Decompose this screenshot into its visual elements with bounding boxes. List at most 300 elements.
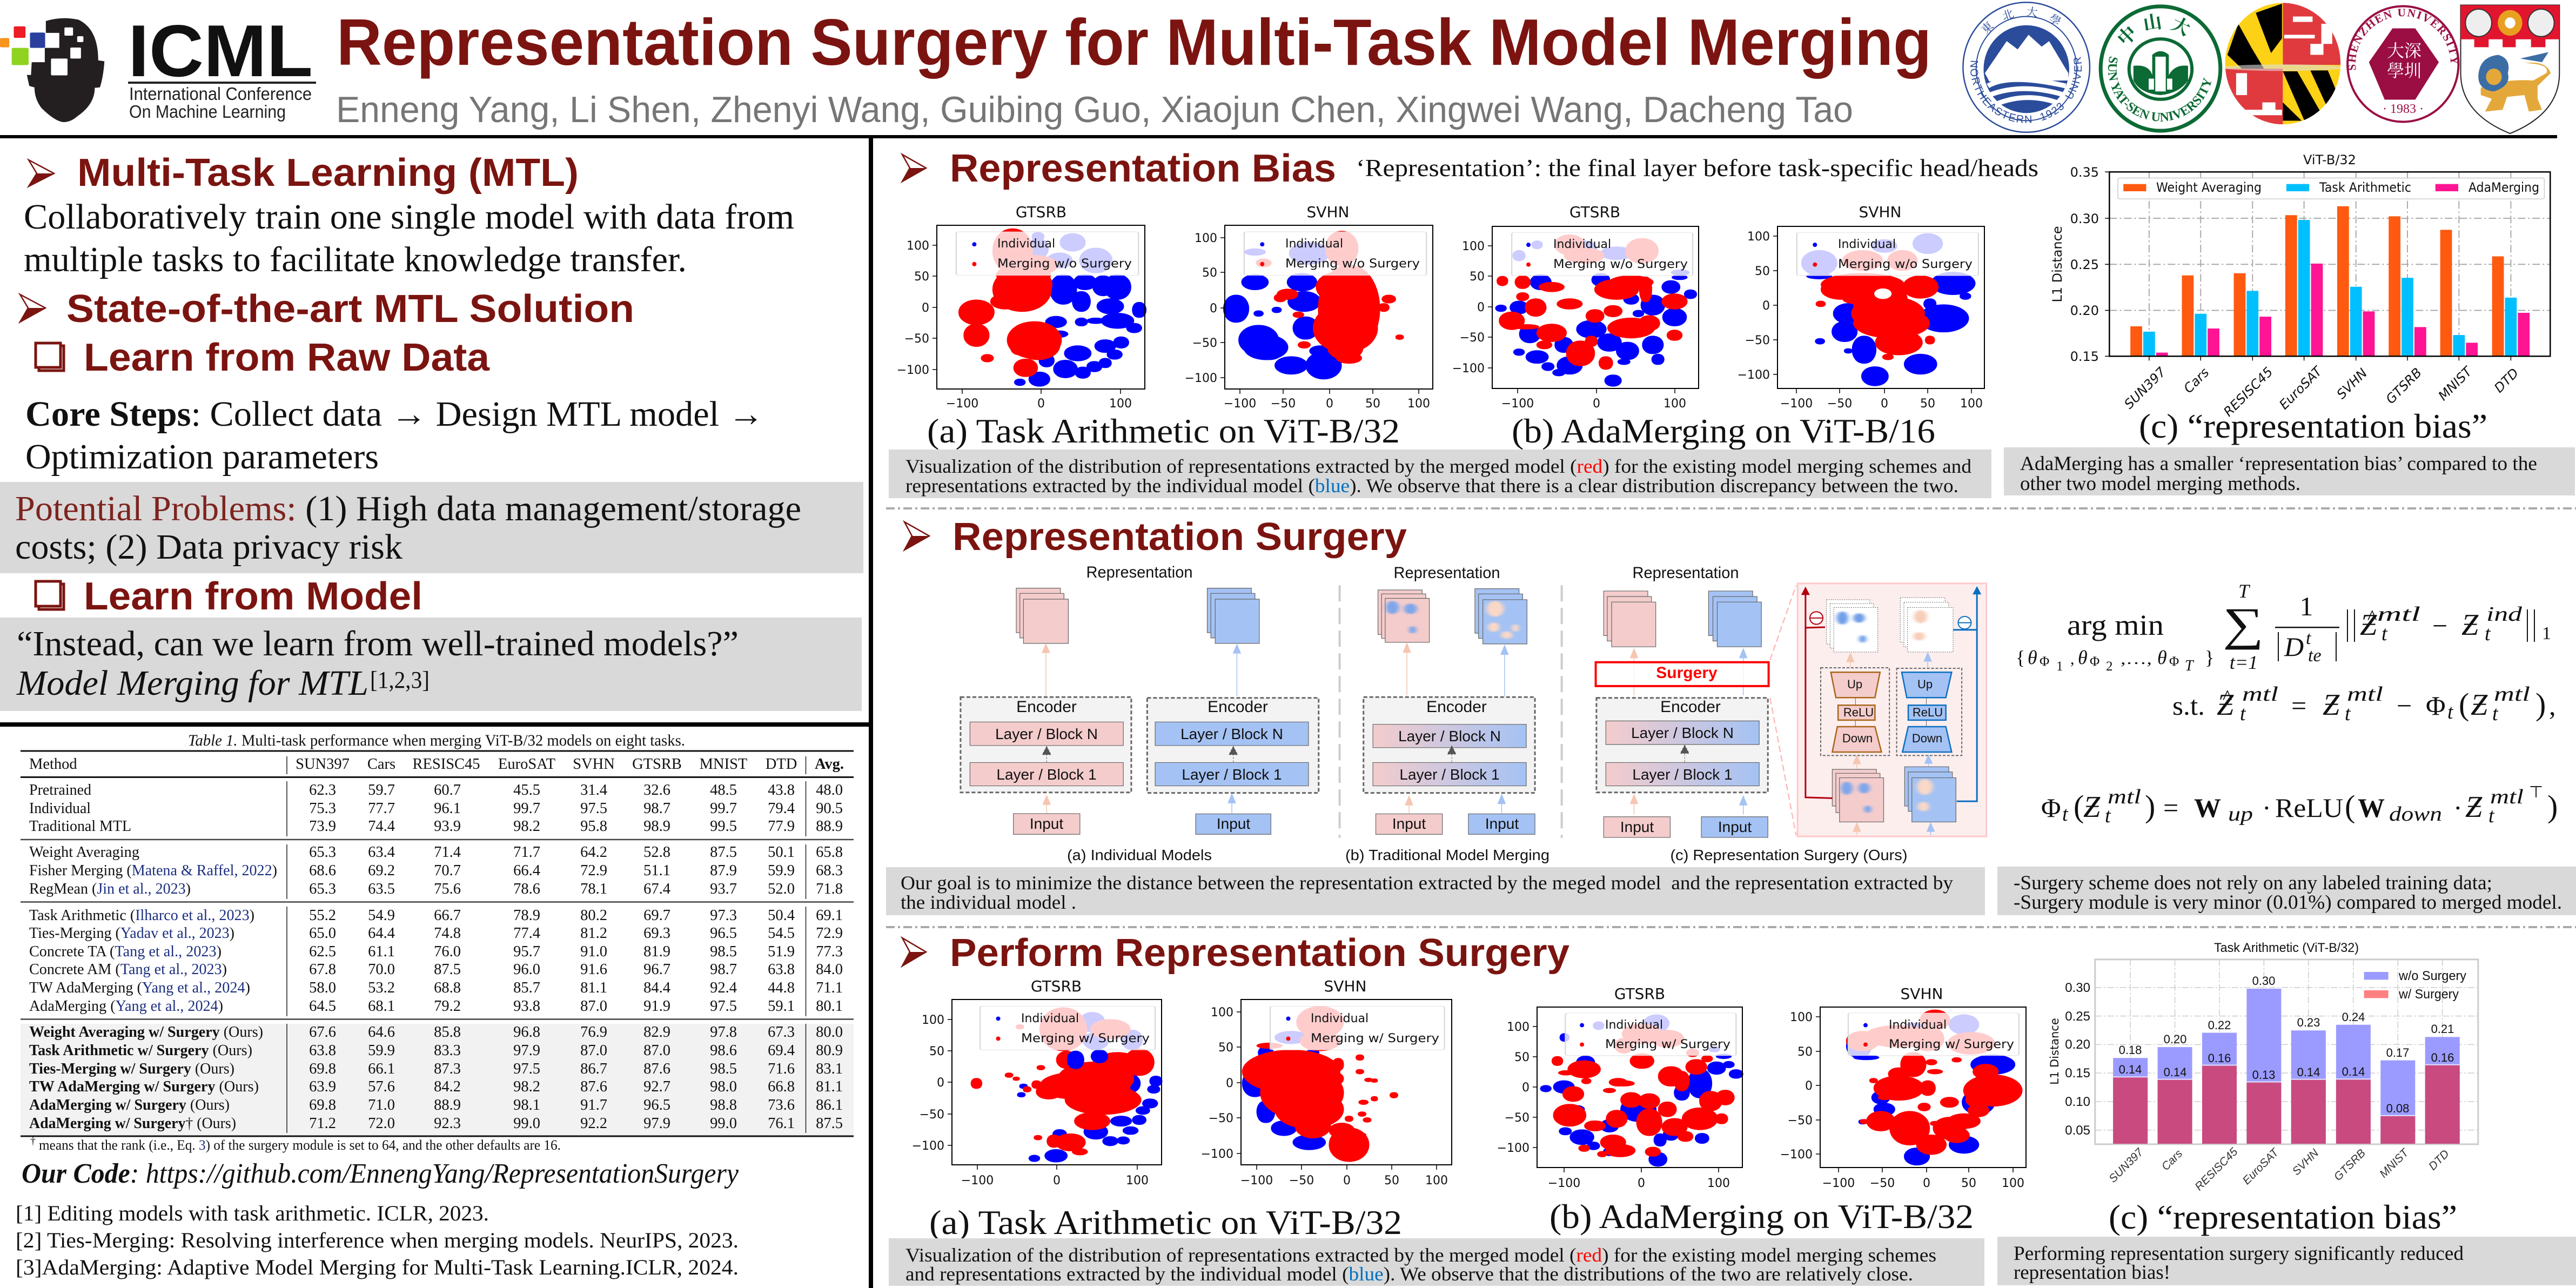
callout: t-SNE visualization note <box>889 450 1991 498</box>
plot frames and axes: bias: −100 <box>897 364 929 377</box>
equations: surgery objective: Ƶ <box>2360 608 2377 642</box>
bar chart: Task Arithmetic with and without surgery: 0.08 <box>2386 1102 2409 1115</box>
table values: 71.7 <box>513 844 540 861</box>
bar chart: Task Arithmetic with and without surgery: 0.14 <box>2342 1065 2365 1078</box>
bar chart: Task Arithmetic with and without surgery: 0.24 <box>2342 1010 2365 1024</box>
plot frames and axes: bias: SVHN <box>1307 203 1349 221</box>
equations: surgery objective: = <box>2291 690 2306 721</box>
table values: 97.3 <box>710 907 737 924</box>
diagram: model architectures: Encoder <box>1660 698 1721 716</box>
text: core steps: Core Steps: Collect data → Design MTL model → <box>25 394 764 434</box>
table footnote: means that the rank (i.e., Eq. 3) of the surgery module is set to 64, and the other defaults are 16. <box>39 1137 561 1153</box>
table values: 83.1 <box>816 1061 843 1077</box>
plot frames and axes: bias: 100 <box>1195 232 1217 245</box>
equations: surgery objective: mtl <box>2490 786 2524 808</box>
table values: 92.3 <box>434 1115 461 1132</box>
equations: surgery objective: D <box>2284 632 2304 662</box>
diagram: model architectures: Input <box>1030 815 1063 832</box>
plot frames and axes: surgery: 100 <box>1507 1021 1530 1034</box>
table values: 81.1 <box>580 980 607 996</box>
table values: 63.8 <box>768 961 795 978</box>
table values: 87.5 <box>434 961 461 978</box>
table values: 85.8 <box>434 1024 461 1041</box>
table values: 66.1 <box>368 1061 395 1077</box>
table method column: Pretrained <box>29 782 91 799</box>
diagram: model architectures: Layer / Block N <box>995 726 1098 742</box>
plot frames and axes: bias: −50 <box>904 332 929 346</box>
text: core steps <box>25 394 764 477</box>
logo: Sun Yat-sen University <box>2098 4 2223 133</box>
table values: 96.5 <box>643 1097 670 1113</box>
table values: 55.2 <box>309 907 336 924</box>
table values: 43.8 <box>768 782 795 799</box>
table values: 98.0 <box>710 1078 737 1095</box>
callout: AdaMerging note: AdaMerging has a smaller ‘representation bias’ compared to the <box>2020 453 2537 475</box>
table values: 69.8 <box>309 1097 336 1113</box>
table values: 96.5 <box>710 925 737 942</box>
bar chart: ViT-B/32 L1 distance: 0.30 <box>2070 211 2099 226</box>
table method column: TW AdaMerging w/ Surgery (Ours) <box>29 1078 259 1095</box>
plot frames and axes: bias: −50 <box>1192 337 1217 350</box>
diagram: model architectures: Input <box>1485 815 1519 832</box>
plot frames and axes: bias: 0 <box>1326 397 1333 411</box>
table values: 80.0 <box>816 1024 843 1041</box>
logo: ICML: On Machine Learning <box>129 102 286 122</box>
plot frames and axes: bias: −50 <box>1827 397 1852 411</box>
logo: Shenzhen University: 圳 <box>2404 61 2421 81</box>
table values: 44.8 <box>768 980 795 996</box>
table values: 87.0 <box>643 1042 670 1059</box>
references <box>16 1201 739 1279</box>
plot frames and axes: bias: 50 <box>1202 266 1217 280</box>
table values: 83.3 <box>434 1042 461 1059</box>
plot frames and axes: surgery: −50 <box>1505 1111 1530 1125</box>
table values: 74.8 <box>434 925 461 942</box>
table values: 91.0 <box>580 943 607 960</box>
plot frames and axes: surgery: 100 <box>1425 1174 1448 1188</box>
equations: surgery objective: 1 <box>2542 623 2551 643</box>
table header: Cars <box>367 756 395 773</box>
equations: surgery objective: arg min <box>2067 609 2164 641</box>
plot frames and axes: surgery: −50 <box>1289 1174 1314 1188</box>
table method column: Fisher Merging (Matena & Raffel, 2022) <box>29 862 277 879</box>
table values: 99.0 <box>513 1115 540 1132</box>
table method column: Concrete TA (Tang et al., 2023) <box>29 943 222 960</box>
callout: AdaMerging note <box>2004 447 2575 495</box>
bar chart: Task Arithmetic with and without surgery: 0.05 <box>2065 1123 2090 1138</box>
equations: surgery objective: ) <box>2547 789 2558 824</box>
table values: 87.5 <box>710 844 737 861</box>
table values: 69.7 <box>643 907 670 924</box>
table values: 60.7 <box>434 782 461 799</box>
table values: 63.9 <box>309 1078 336 1095</box>
table values: 71.1 <box>816 980 843 996</box>
table values: 54.5 <box>768 925 795 942</box>
equations: surgery objective: t <box>2105 804 2111 827</box>
plot frames and axes: bias <box>897 203 1984 411</box>
panel: representation bias <box>889 147 2575 498</box>
table values: 91.7 <box>580 1097 607 1113</box>
plot frames and axes: surgery: 50 <box>1384 1174 1399 1188</box>
table values: 63.5 <box>368 881 395 897</box>
captions: surgery plots: (a) Task Arithmetic on ViT-B/32 <box>929 1203 1402 1242</box>
table values: 59.1 <box>768 998 795 1015</box>
bar chart: Task Arithmetic with and without surgery: 0.22 <box>2208 1018 2231 1032</box>
bar chart: Task Arithmetic with and without surgery: RESISC45 <box>2192 1145 2240 1193</box>
table values: 90.5 <box>816 800 843 817</box>
equations: surgery objective: ,…, <box>2121 650 2152 668</box>
table values: 69.8 <box>309 1061 336 1077</box>
table values: 98.5 <box>710 943 737 960</box>
plot frames and axes: bias: 0 <box>1881 397 1888 411</box>
table values: 73.6 <box>768 1097 795 1113</box>
callout: potential problems <box>0 482 863 573</box>
table values: 50.1 <box>768 844 795 861</box>
table values: 72.9 <box>580 862 607 879</box>
equations: surgery objective: t <box>2447 701 2454 723</box>
plot frames and axes: surgery: 100 <box>922 1014 944 1027</box>
diagram: model architectures: Down <box>1912 732 1942 745</box>
logo: Shenzhen University: 大 <box>2387 41 2404 61</box>
table values: 92.4 <box>710 980 737 996</box>
equations: surgery objective: 2 <box>2106 659 2112 674</box>
table values: 87.0 <box>580 1042 607 1059</box>
bar chart: ViT-B/32 L1 distance <box>2050 152 2550 419</box>
table values: 48.5 <box>710 782 737 799</box>
equations: surgery objective: te <box>2308 646 2322 666</box>
plot frames and axes: surgery: −50 <box>1870 1177 1895 1190</box>
table values: 96.0 <box>513 961 540 978</box>
equations: surgery objective: 1 <box>2056 659 2063 674</box>
plot frames and axes: surgery: 0 <box>1053 1174 1061 1188</box>
bar chart: Task Arithmetic with and without surgery: MNIST <box>2377 1146 2412 1180</box>
callout: surgery result <box>1997 1237 2576 1285</box>
heading: Multi-Task Learning: Multi-Task Learning (MTL) <box>77 151 579 194</box>
table values: 99.7 <box>513 800 540 817</box>
equations: surgery objective: ( <box>2459 687 2469 722</box>
diagram: model architectures: Layer / Block 1 <box>1399 766 1500 783</box>
table values: 70.7 <box>434 862 461 879</box>
callout: surgery properties: -Surgery scheme does not rely on any labeled training data; <box>2014 872 2492 894</box>
table values: 67.4 <box>643 881 670 897</box>
equations: surgery objective: Ƶ <box>2323 688 2340 722</box>
text: MTL definition: multiple tasks to facilitate knowledge transfer. <box>24 240 687 279</box>
callout: potential problems: costs; (2) Data privacy risk <box>15 527 403 567</box>
captions: bias plots: (b) AdaMerging on ViT-B/16 <box>1512 412 1935 450</box>
table values: 92.7 <box>643 1078 670 1095</box>
table values: 80.2 <box>580 907 607 924</box>
equations: surgery objective: ) <box>2145 789 2155 824</box>
references: [3]AdaMerging: Adaptive Model Merging for Multi-Task Learning.ICLR, 2024. <box>16 1255 739 1279</box>
callout: t-SNE visualization note: Visualization of the distribution of representations extracted by the merged model ( red) for the existing model merging schemes and <box>905 455 1971 477</box>
plot frames and axes: bias: GTSRB <box>1569 203 1620 221</box>
bar chart: ViT-B/32 L1 distance: DTD <box>2491 365 2521 395</box>
callout: surgery properties <box>1997 867 2576 915</box>
table values: 80.9 <box>816 1042 843 1059</box>
plot frames and axes: bias: Merging w/o Surgery <box>1553 258 1688 271</box>
table values: 98.2 <box>513 818 540 835</box>
table header: Avg. <box>815 756 844 773</box>
bar chart: Task Arithmetic with and without surgery: 0.16 <box>2431 1051 2454 1064</box>
bar chart: Task Arithmetic with and without surgery: 0.20 <box>2065 1037 2090 1052</box>
diagram: model architectures: Layer / Block 1 <box>996 766 1097 783</box>
scatter points: bias t-SNE plots <box>956 229 1978 386</box>
table values: 66.8 <box>768 1078 795 1095</box>
plot frames and axes: bias: Individual <box>1838 238 1896 251</box>
table values: 71.8 <box>816 881 843 897</box>
equations: surgery objective: mtl <box>2242 683 2278 706</box>
plot frames and axes: surgery: 50 <box>1797 1045 1813 1059</box>
icon: arrow bullet <box>904 522 929 551</box>
equations: surgery objective: , <box>2070 650 2075 668</box>
plot frames and axes: surgery: Individual <box>1889 1018 1947 1032</box>
icon: arrow bullet <box>20 294 45 323</box>
plot frames and axes: bias: Merging w/o Surgery <box>1285 257 1420 271</box>
captions: bias plots: (a) Task Arithmetic on ViT-B/32 <box>927 412 1400 450</box>
table method column: AdaMerging w/ Surgery (Ours) <box>29 1097 230 1113</box>
table header: SVHN <box>573 756 615 773</box>
bar chart: ViT-B/32 L1 distance: L1 Distance <box>2050 226 2065 303</box>
table values: 70.0 <box>368 961 395 978</box>
bar chart: Task Arithmetic with and without surgery: 0.14 <box>2164 1065 2186 1079</box>
table values: 71.6 <box>768 1061 795 1077</box>
callout: surgery t-SNE note: and representations extracted by the individual model ( blue). We observe that the distributions of the two are relatively close. <box>905 1263 1913 1285</box>
table values: 79.4 <box>768 800 795 817</box>
bar chart: ViT-B/32 L1 distance: 0.15 <box>2070 349 2099 364</box>
icon: arrow bullet <box>29 160 54 187</box>
plot frames and axes: surgery: GTSRB <box>1614 985 1665 1003</box>
bar chart: Task Arithmetic with and without surgery: EuroSAT <box>2240 1145 2282 1187</box>
equations: surgery objective: T <box>2185 658 2195 674</box>
plot frames and axes: bias: 0 <box>1477 301 1485 314</box>
diagram: model architectures: ReLU <box>1913 706 1943 719</box>
callout: surgery t-SNE note: Visualization of the distribution of representations extracted by the merged model ( red) for the existing model merging schemes <box>905 1244 1936 1266</box>
plot frames and axes: surgery: −100 <box>1822 1177 1855 1190</box>
text: MTL definition <box>24 197 794 279</box>
bar chart: ViT-B/32 L1 distance: SVHN <box>2334 365 2370 402</box>
table values: 51.1 <box>643 862 670 879</box>
bar chart: Task Arithmetic with and without surgery: 0.23 <box>2297 1016 2320 1029</box>
table values: 88.9 <box>434 1097 461 1113</box>
table values: 87.3 <box>434 1061 461 1077</box>
references: [1] Editing models with task arithmetic. ICLR, 2023. <box>16 1201 489 1225</box>
callout: model merging question: Model Merging for MTL <box>16 663 368 703</box>
table values: 78.1 <box>580 881 607 897</box>
equations: surgery objective: Φ <box>2041 793 2061 823</box>
table values: 93.9 <box>434 818 461 835</box>
plot frames and axes: surgery: 100 <box>2002 1177 2024 1190</box>
plot frames and axes: surgery: 50 <box>1514 1051 1530 1064</box>
bar chart: Task Arithmetic with and without surgery: SUN397 <box>2107 1145 2146 1185</box>
plot frames and axes: bias: 50 <box>1365 397 1380 411</box>
callout: surgery result: representation bias! <box>2014 1262 2170 1284</box>
plot frames and axes: surgery: −50 <box>920 1108 944 1122</box>
bar chart: Task Arithmetic with and without surgery: 0.13 <box>2252 1068 2275 1082</box>
table method column: Individual <box>29 800 91 817</box>
diagram: model architectures: Encoder <box>1208 698 1268 716</box>
caption: surgery bias chart: (c) “representation bias” <box>2109 1198 2457 1236</box>
note: representation definition: ‘Representation’: the final layer before task-specific head/heads <box>1356 154 2038 182</box>
plot frames and axes: surgery: Merging w/ Surgery <box>1021 1032 1150 1045</box>
table values: 80.1 <box>816 998 843 1015</box>
plot frames and axes: surgery: Individual <box>1605 1018 1663 1032</box>
table values: 71.4 <box>434 844 461 861</box>
table header: RESISC45 <box>412 756 480 773</box>
table values: 99.7 <box>710 800 737 817</box>
table header: MNIST <box>700 756 747 773</box>
table values: 79.2 <box>434 998 461 1015</box>
equations: surgery objective: 1 <box>2299 591 2313 621</box>
equations: surgery objective: · <box>2453 793 2463 823</box>
diagram: model architectures: Up <box>1917 677 1933 691</box>
table method column <box>29 756 277 1132</box>
icon: checkbox bullet <box>36 581 64 609</box>
plot frames and axes: surgery: −100 <box>1780 1148 1813 1162</box>
logo: ICML: International Conference <box>129 84 312 104</box>
icon: arrow bullet <box>902 938 926 967</box>
table values: 74.4 <box>368 818 395 835</box>
plot frames and axes: bias: Merging w/o Surgery <box>1838 258 1973 271</box>
table values: 67.8 <box>309 961 336 978</box>
table values: 98.7 <box>710 961 737 978</box>
table values: 99.5 <box>710 818 737 835</box>
plot frames and axes: bias: 0 <box>1037 397 1045 411</box>
diagram: model architectures: Encoder <box>1426 698 1487 716</box>
callout: AdaMerging note: other two model merging methods. <box>2020 473 2300 495</box>
diagram: model architectures: Representation <box>1633 564 1739 582</box>
equations: surgery objective: t <box>2345 702 2351 725</box>
table values: 95.8 <box>580 818 607 835</box>
bar chart: ViT-B/32 L1 distance: GTSRB <box>2383 365 2425 407</box>
plot frames and axes: bias: −100 <box>1501 397 1534 411</box>
table values: 86.7 <box>580 1061 607 1077</box>
table header: GTSRB <box>632 756 682 773</box>
equations: surgery objective: − <box>2397 690 2412 721</box>
table values: 87.9 <box>710 862 737 879</box>
table values: 64.2 <box>580 844 607 861</box>
table values: 87.6 <box>643 1061 670 1077</box>
plot frames and axes: surgery: 0 <box>1343 1174 1351 1188</box>
logo: Shenzhen University <box>2346 5 2459 123</box>
bar chart: Task Arithmetic with and without surgery: 0.15 <box>2065 1066 2090 1081</box>
plot frames and axes: bias: 100 <box>1663 397 1686 411</box>
plot frames and axes: surgery: Merging w/ Surgery <box>1889 1038 2014 1051</box>
logo: Sun Yat-sen University: SUN YAT-SEN UNIVERSITY <box>2108 56 2212 122</box>
diagram: model architectures: Up <box>1847 677 1862 691</box>
table values: 63.8 <box>309 1042 336 1059</box>
captions: surgery plots: (b) AdaMerging on ViT-B/32 <box>1549 1197 1974 1236</box>
table method column: Method <box>29 756 77 773</box>
plot frames and axes: surgery: 0 <box>937 1076 944 1090</box>
callout: model merging question <box>0 618 862 711</box>
table footnote: † <box>30 1135 36 1147</box>
plot frames and axes: surgery: GTSRB <box>1031 977 1082 995</box>
table values: 65.3 <box>309 844 336 861</box>
scatter points: surgery t-SNE plots <box>973 1006 2021 1166</box>
diagram: model architectures: (a) Individual Models <box>1067 847 1212 863</box>
table values: 65.8 <box>816 844 843 861</box>
captions: bias plots <box>927 412 1935 450</box>
equations: surgery objective: T <box>2238 580 2251 602</box>
table values: 67.6 <box>309 1024 336 1041</box>
table values: 84.4 <box>643 980 670 996</box>
equations: surgery objective: W <box>2358 793 2385 823</box>
plot frames and axes: surgery: 0 <box>1805 1079 1813 1093</box>
table values: 87.0 <box>580 998 607 1015</box>
table values: 69.1 <box>816 907 843 924</box>
table values: 71.0 <box>368 1097 395 1113</box>
table method column: Weight Averaging w/ Surgery (Ours) <box>29 1024 263 1041</box>
heading: State-of-the-art: State-of-the-art MTL Solution <box>66 287 634 331</box>
equations: surgery objective: ⊤ <box>2529 783 2543 802</box>
plot frames and axes: surgery: SVHN <box>1901 985 1943 1003</box>
table method column: Weight Averaging <box>29 844 139 861</box>
equations: surgery objective: mtl <box>2377 603 2420 626</box>
equations: surgery objective: t <box>2488 804 2495 827</box>
plot frames and axes: surgery: −50 <box>1788 1114 1813 1128</box>
table values: 66.4 <box>513 862 540 879</box>
equations: surgery objective: Φ <box>2169 654 2179 669</box>
plot frames and axes: bias: 100 <box>1109 397 1132 411</box>
table values: 81.2 <box>580 925 607 942</box>
table values: 58.0 <box>309 980 336 996</box>
diagram: model architectures: Layer / Block 1 <box>1182 766 1282 783</box>
plot frames and axes: bias: 0 <box>922 301 929 315</box>
table values: 61.1 <box>368 943 395 960</box>
captions: surgery plots <box>929 1197 1974 1242</box>
table values: 96.8 <box>513 1024 540 1041</box>
table header: SUN397 <box>296 756 350 773</box>
table values: 87.5 <box>816 1115 843 1132</box>
equations: surgery objective: t <box>2382 622 2388 645</box>
table values: 64.4 <box>368 925 395 942</box>
callout: goal: the individual model . <box>901 891 1076 913</box>
plot frames and axes: bias: 100 <box>1747 230 1770 244</box>
diagram: model architectures: Representation <box>1086 564 1193 581</box>
diagram: model architectures: (b) Traditional Model Merging <box>1345 847 1549 863</box>
panel: representation surgery <box>886 515 2576 915</box>
plot frames and axes: bias: −100 <box>1780 397 1813 411</box>
callout: potential problems: Potential Problems: (1) High data management/storage <box>15 489 801 528</box>
table values: 97.5 <box>710 998 737 1015</box>
plot frames and axes: bias: SVHN <box>1859 203 1901 221</box>
plot frames and axes: bias: 100 <box>1407 397 1430 411</box>
table values: 68.3 <box>816 862 843 879</box>
table values: 78.9 <box>513 907 540 924</box>
table values: 76.1 <box>768 1115 795 1132</box>
bar chart: Task Arithmetic with and without surgery: SVHN <box>2290 1146 2322 1178</box>
plot frames and axes: surgery: −100 <box>1548 1177 1580 1190</box>
plot frames and axes: bias: 100 <box>1960 397 1983 411</box>
table values: 97.5 <box>580 800 607 817</box>
diagram: model architectures: Layer / Block N <box>1180 726 1283 742</box>
equations: surgery objective: − <box>2432 611 2447 641</box>
equations: surgery objective: Φ <box>2090 654 2099 669</box>
bar chart: Task Arithmetic with and without surgery: 0.25 <box>2065 1009 2090 1024</box>
logo: Shenzhen University: 學 <box>2387 61 2404 81</box>
plot frames and axes: bias: −100 <box>946 397 978 411</box>
heading: Learn from Raw Data: Learn from Raw Data <box>84 336 490 379</box>
plot frames and axes: surgery: Individual <box>1021 1012 1079 1025</box>
title: Representation Surgery for Multi-Task Model Merging <box>337 5 1931 79</box>
table values <box>309 782 843 1132</box>
table values: 69.3 <box>643 925 670 942</box>
equations: surgery objective: t <box>2492 702 2499 725</box>
table values: 64.5 <box>309 998 336 1015</box>
table values: 96.7 <box>643 961 670 978</box>
heading: Representation Bias: Representation Bias <box>950 147 1336 190</box>
table values: 99.0 <box>710 1115 737 1132</box>
